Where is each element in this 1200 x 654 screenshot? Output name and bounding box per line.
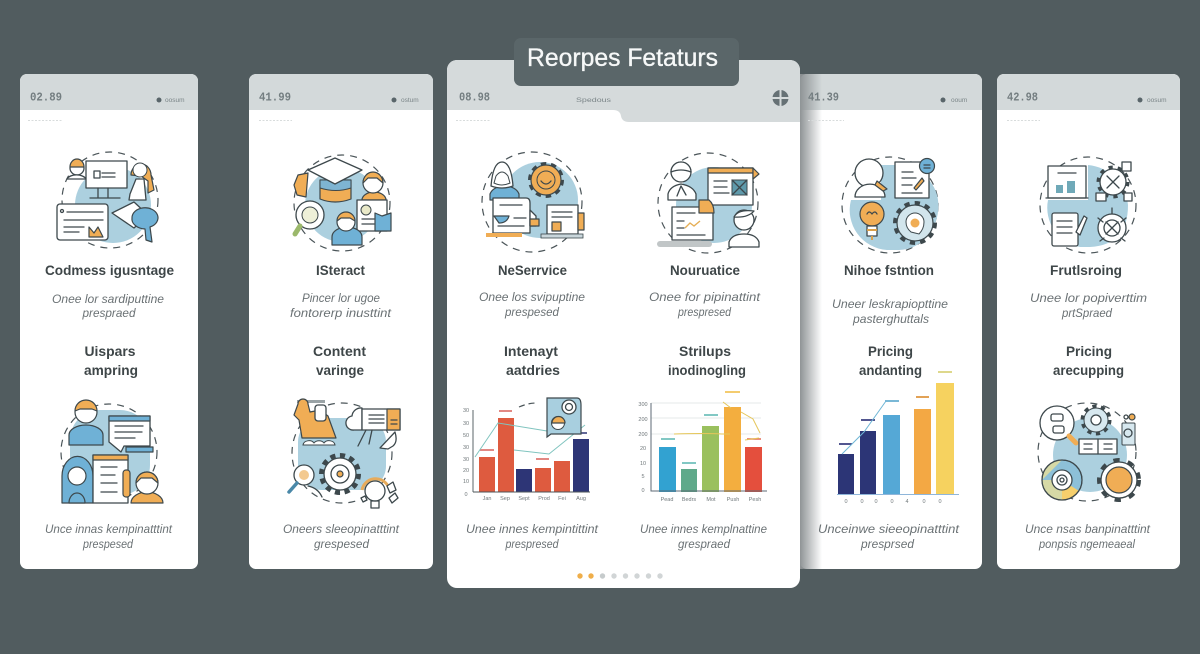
chart: coloured bars: Push bbox=[727, 497, 739, 503]
description: Unee innes kemplnattine bbox=[640, 522, 767, 536]
chart: bar chart with callout: 0 bbox=[464, 492, 468, 498]
description: Pincer lor ugoe bbox=[302, 291, 380, 305]
description: grespraed bbox=[678, 537, 730, 551]
chart: bar chart with callout: Fei bbox=[558, 496, 566, 502]
heading: arecupping bbox=[1053, 362, 1124, 378]
heading: andanting bbox=[859, 362, 922, 378]
icon: service team bbox=[482, 152, 584, 252]
icon: presentation and gear bbox=[289, 399, 400, 508]
chart: bar chart with callout: 30 bbox=[463, 457, 469, 463]
panel: card 2 bbox=[249, 74, 433, 569]
chart: bar chart with callout: Prod bbox=[538, 496, 550, 502]
description: Unceinwe sieeopinatttint bbox=[818, 522, 960, 536]
description: Unce nsas banpinatttint bbox=[1025, 522, 1151, 536]
chart: rising bars: 0 bbox=[922, 499, 926, 505]
chart: coloured bars: 200 bbox=[638, 417, 648, 423]
chart: bar chart with callout bbox=[463, 398, 590, 502]
panel: card 1: 02.89 bbox=[30, 92, 62, 104]
heading: ISteract bbox=[316, 262, 365, 278]
chart: rising bars: 0 bbox=[860, 499, 864, 505]
panel: card 1 bbox=[20, 74, 198, 569]
chart: rising bars: 0 bbox=[890, 499, 894, 505]
heading: Uispars bbox=[84, 343, 136, 359]
chart: rising bars: 0 bbox=[874, 499, 878, 505]
chart: rising bars: 4 bbox=[905, 499, 909, 505]
description bbox=[290, 291, 392, 320]
description: prespesed bbox=[504, 305, 559, 319]
description: grespesed bbox=[314, 537, 369, 551]
description bbox=[640, 522, 767, 551]
chart: bar chart with callout: Aug bbox=[576, 496, 586, 502]
description: ponpsis ngemeaeal bbox=[1038, 537, 1135, 551]
heading bbox=[1053, 343, 1124, 378]
chart: bar chart with callout: 20 bbox=[463, 468, 469, 474]
chart: bar chart with callout: Sept bbox=[518, 496, 530, 502]
chart: coloured bars: Pead bbox=[661, 497, 673, 503]
icon: globe bbox=[772, 89, 789, 107]
panel: card 2: ostum bbox=[401, 97, 419, 104]
description bbox=[1025, 522, 1151, 551]
panel: center featured card: 08.98 bbox=[459, 92, 490, 104]
description bbox=[832, 297, 948, 326]
title banner bbox=[514, 38, 739, 86]
chart: coloured bars: 0 bbox=[641, 488, 645, 494]
panel: card 2: 41.99 bbox=[259, 92, 291, 104]
heading bbox=[859, 343, 922, 378]
description bbox=[466, 522, 599, 551]
icon: team with monitor and chat bbox=[57, 152, 158, 248]
chart: coloured bars: 300 bbox=[638, 402, 648, 408]
description: prtSpraed bbox=[1061, 306, 1112, 320]
chart: coloured bars: Pesh bbox=[749, 497, 761, 503]
chart: rising bars: 0 bbox=[938, 499, 942, 505]
description bbox=[479, 290, 585, 319]
chart: coloured bars: 20 bbox=[640, 446, 646, 452]
panel: card 4: ooum bbox=[951, 97, 967, 104]
panel: card 5: oosum bbox=[1147, 97, 1167, 104]
description: prespesed bbox=[82, 537, 133, 551]
heading: Frutlsroing bbox=[1050, 262, 1122, 278]
heading: inodinogling bbox=[668, 362, 746, 378]
description: Onee los svipuptine bbox=[479, 290, 585, 304]
description: Uneer leskrapiopttine bbox=[832, 297, 948, 311]
description: Oneers sleeopinatttint bbox=[283, 522, 400, 536]
chart: rising bars: 0 bbox=[844, 499, 848, 505]
description: Unee lor popiverttim bbox=[1030, 291, 1147, 305]
chart: bar chart with callout: 50 bbox=[463, 433, 469, 439]
panel: card 5 bbox=[997, 74, 1180, 569]
heading: Codmess igusntage bbox=[45, 262, 174, 278]
chart: coloured bars: 10 bbox=[640, 461, 646, 467]
description: fontorerp inusttint bbox=[290, 306, 392, 320]
pagination dots bbox=[577, 573, 663, 579]
description: prespresed bbox=[505, 537, 559, 551]
heading: aatdries bbox=[506, 362, 560, 378]
chart: coloured bars: 5 bbox=[641, 474, 645, 480]
heading: Nihoe fstntion bbox=[844, 262, 934, 278]
chart: coloured bars: 200 bbox=[638, 432, 648, 438]
description: prespraed bbox=[82, 306, 136, 320]
heading bbox=[504, 343, 560, 378]
heading: Nouruatice bbox=[670, 262, 740, 278]
heading: Content bbox=[313, 343, 366, 359]
description: Unce innas kempinatttint bbox=[45, 522, 173, 536]
description: prespresed bbox=[677, 305, 731, 319]
chart: coloured bars: Bedrs bbox=[682, 497, 696, 503]
icon: analysis and gears bbox=[1038, 403, 1138, 501]
icon: idea and settings bbox=[842, 157, 938, 253]
panel: card 4: 41.39 bbox=[808, 92, 839, 104]
icon: tools and workflow bbox=[1040, 157, 1136, 253]
chart: bar chart with callout: Sep bbox=[500, 496, 510, 502]
chart: coloured bars: Mot bbox=[706, 497, 716, 503]
heading: ampring bbox=[84, 362, 138, 378]
panel: card 5: 42.98 bbox=[1007, 92, 1038, 104]
chart: bar chart with callout: 30 bbox=[463, 421, 469, 427]
chart: coloured bars bbox=[638, 392, 767, 503]
description bbox=[45, 522, 173, 551]
panel: card 4 bbox=[800, 74, 982, 569]
icon: people and documents bbox=[61, 400, 163, 503]
heading: NeSerrvice bbox=[498, 262, 567, 278]
icon: graduation and learners bbox=[294, 155, 391, 251]
description bbox=[818, 522, 960, 551]
panel: center featured card bbox=[447, 60, 800, 588]
description bbox=[52, 292, 164, 320]
heading: varinge bbox=[316, 362, 364, 378]
title banner: Reorpes Fetaturs bbox=[527, 44, 718, 72]
description bbox=[1030, 291, 1147, 320]
description: Unee innes kempintittint bbox=[466, 522, 599, 536]
chart: bar chart with callout: 10 bbox=[463, 479, 469, 485]
chart: bar chart with callout: Jan bbox=[483, 496, 491, 502]
icon: notices and documents bbox=[657, 153, 759, 253]
heading: Intenayt bbox=[504, 343, 558, 359]
chart: bar chart with callout: 30 bbox=[463, 445, 469, 451]
description: presprsed bbox=[860, 537, 914, 551]
heading: Strilups bbox=[679, 343, 731, 359]
heading: Pricing bbox=[868, 343, 913, 359]
description: pasterghuttals bbox=[852, 312, 929, 326]
panel: card 1: oosum bbox=[165, 97, 185, 104]
panel: center featured card: Spedous bbox=[576, 97, 612, 104]
heading: Pricing bbox=[1066, 343, 1112, 359]
chart: rising bars bbox=[837, 372, 959, 505]
description bbox=[283, 522, 400, 551]
heading bbox=[313, 343, 366, 378]
heading bbox=[668, 343, 746, 378]
description: Onee lor sardiputtine bbox=[52, 292, 164, 306]
chart: bar chart with callout: 30 bbox=[463, 408, 469, 414]
description: Onee for pipinattint bbox=[649, 290, 761, 304]
heading bbox=[84, 343, 138, 378]
description bbox=[649, 290, 761, 319]
